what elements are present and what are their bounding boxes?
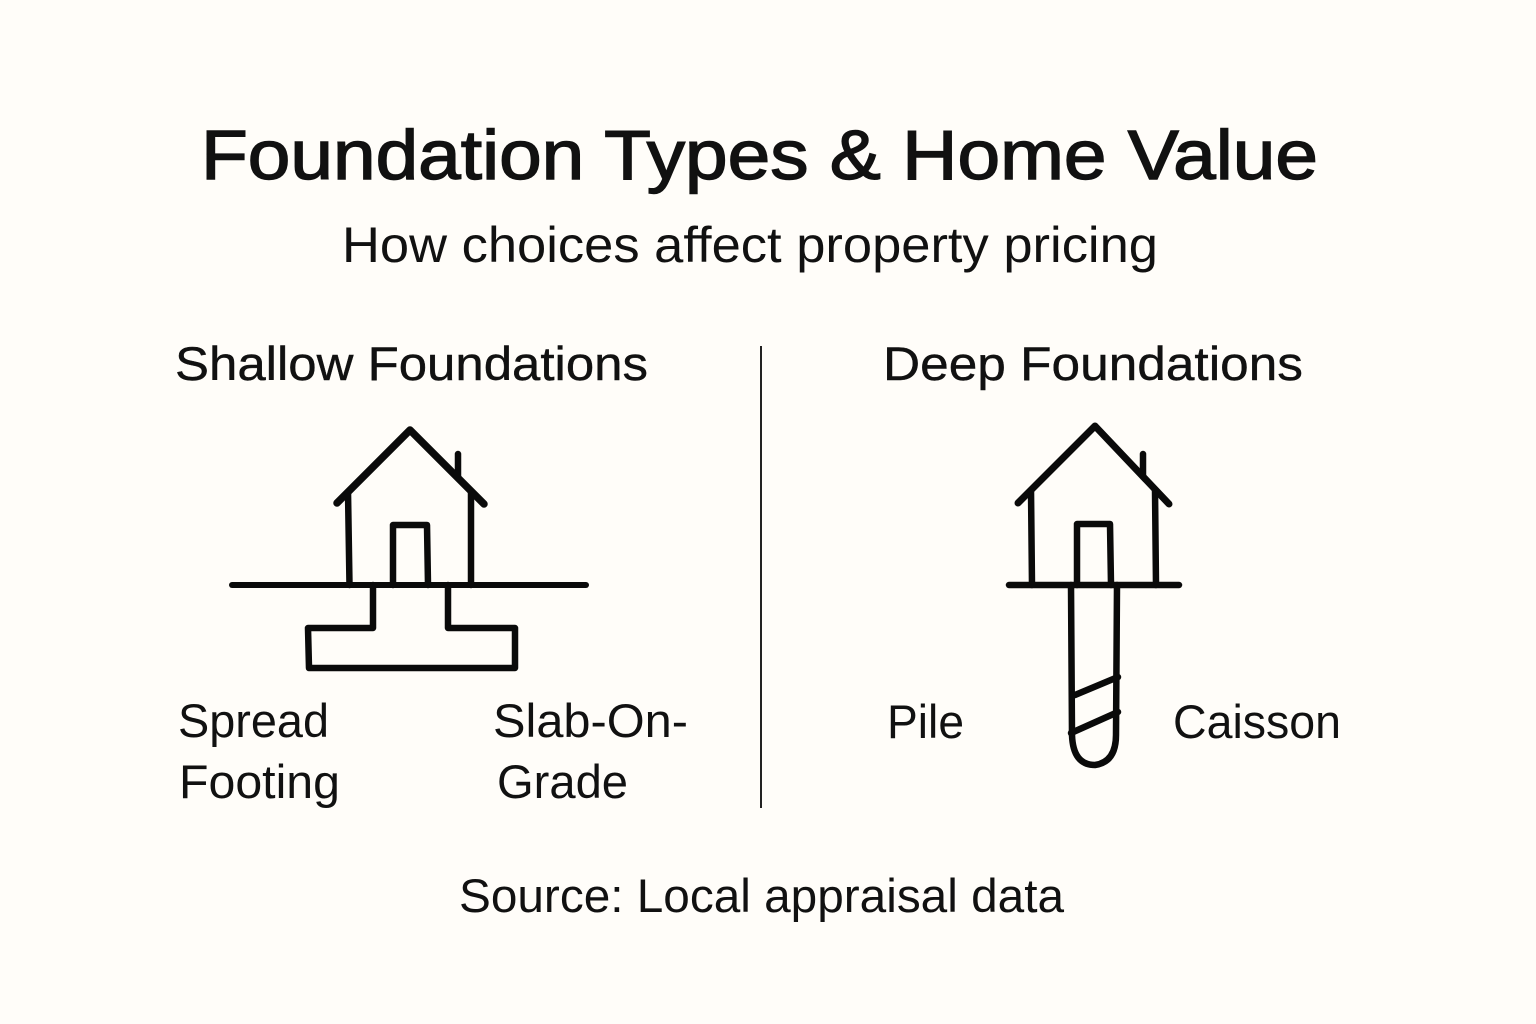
label: slab-on-grade: Slab-On- <box>493 694 688 747</box>
icon: house on pile <box>1009 426 1179 765</box>
label: caisson: Caisson <box>1173 695 1341 748</box>
source note: Source: Local appraisal data <box>459 869 1065 922</box>
label: spread footing: Footing <box>179 755 340 808</box>
title: Foundation Types & Home Value <box>201 116 1318 194</box>
subtitle: How choices affect property pricing <box>342 217 1158 273</box>
heading: shallow foundations: Shallow Foundations <box>175 337 648 390</box>
heading: deep foundations: Deep Foundations <box>883 337 1303 390</box>
label: pile: Pile <box>887 695 964 748</box>
center divider <box>760 346 762 808</box>
panel: deep foundations <box>883 337 1341 765</box>
label: spread footing: Spread <box>178 694 329 747</box>
icon: house on spread footing <box>232 430 586 668</box>
label: slab-on-grade: Grade <box>497 755 628 808</box>
panel: shallow foundations <box>175 337 688 808</box>
